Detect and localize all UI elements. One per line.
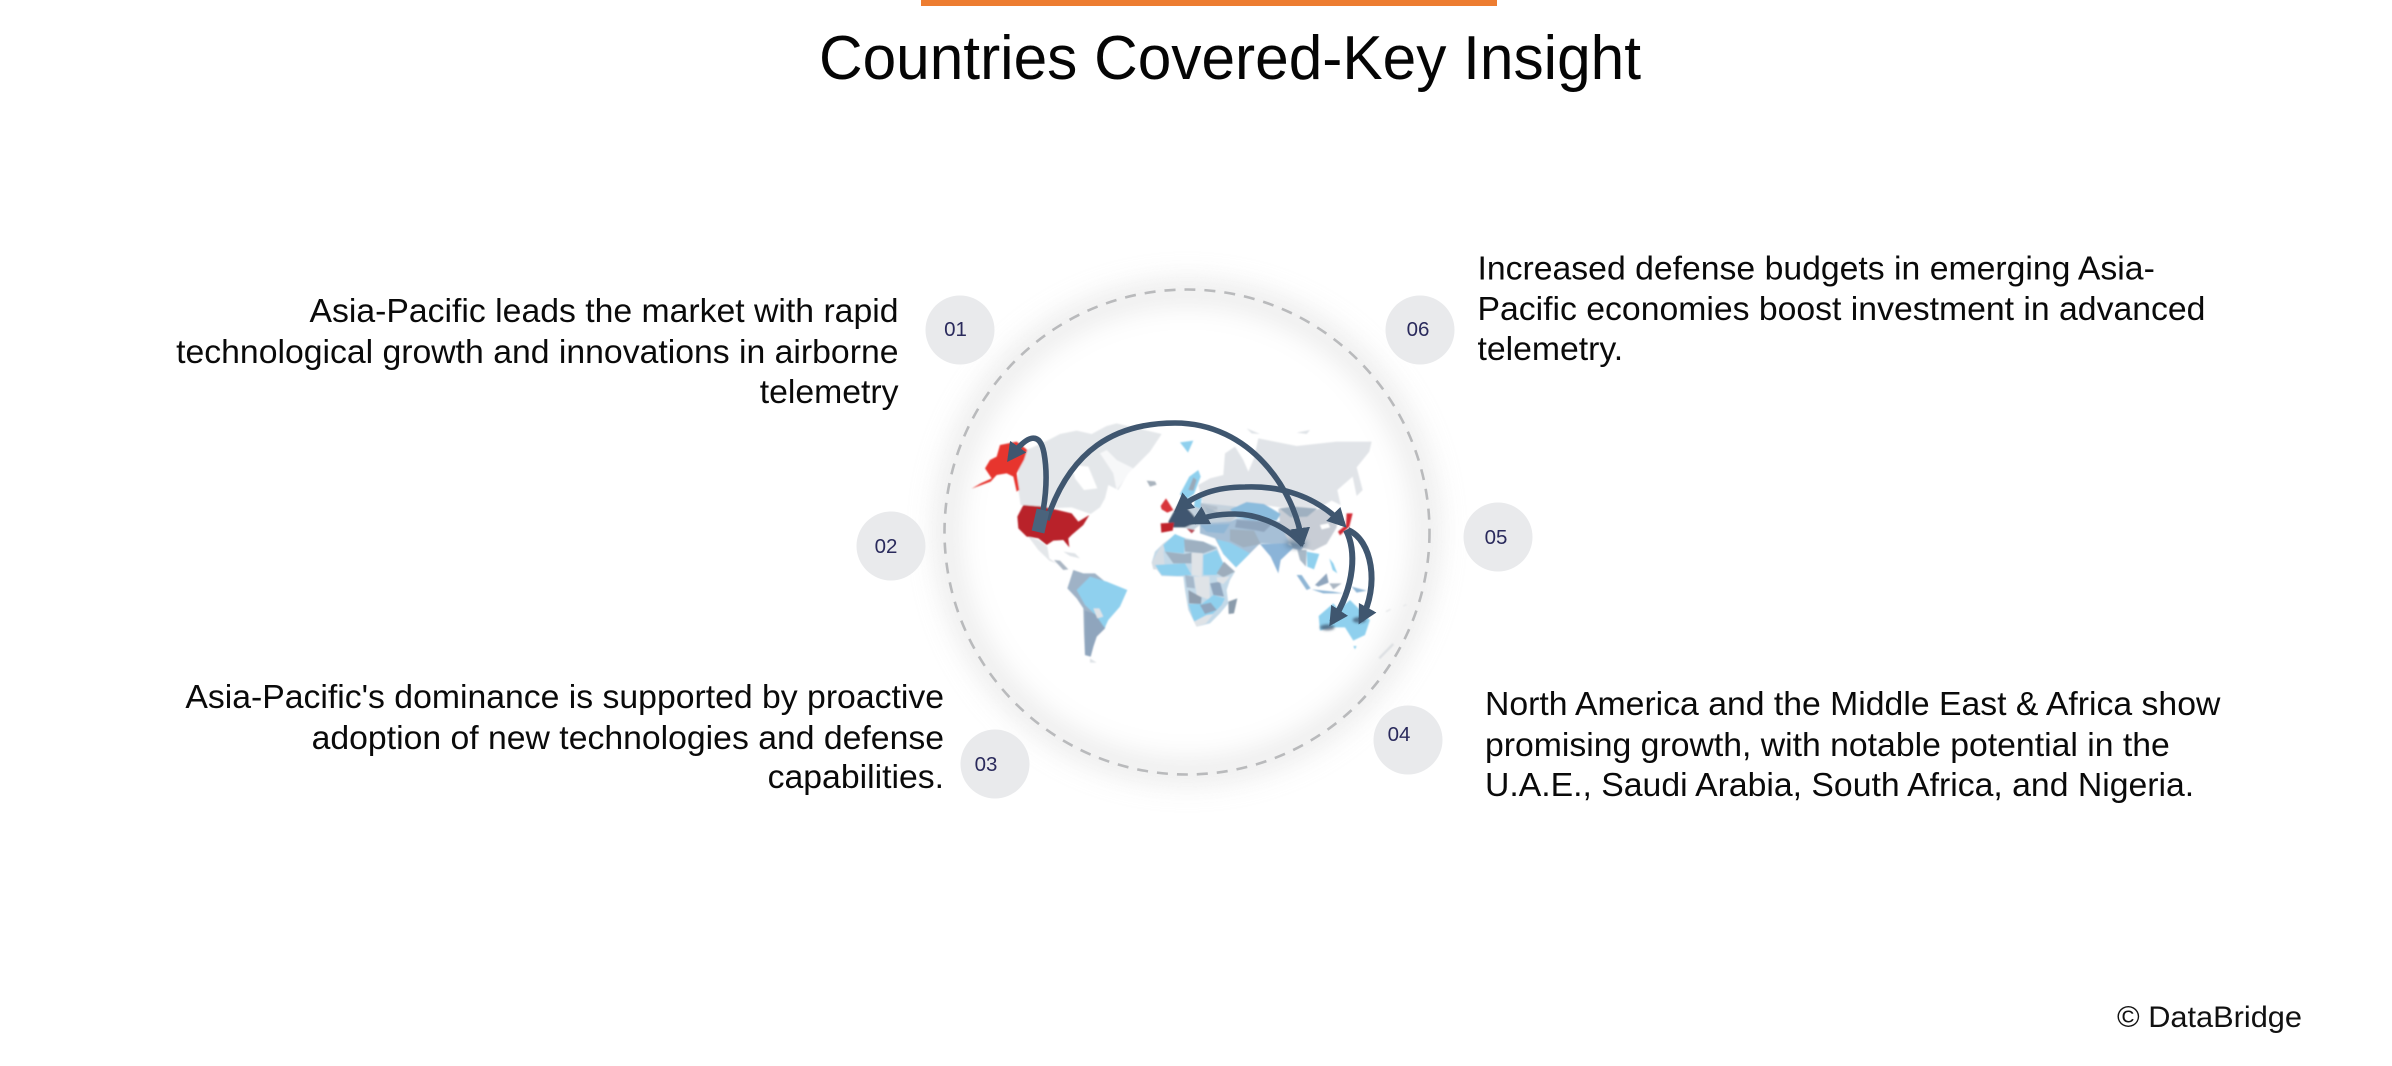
- badge 05: 05: [1485, 526, 1507, 549]
- arrow: usa to alaska: [1010, 438, 1046, 526]
- map: southeast asia and oceania: [1297, 558, 1367, 593]
- map: australia: [1319, 600, 1407, 658]
- arrow: japan to western australia: [1332, 530, 1352, 622]
- insight 01 text: telemetry: [760, 373, 899, 411]
- insight 01 text: technological growth and innovations in airborne: [176, 333, 898, 371]
- badge 03: [960, 730, 1030, 798]
- arrow: usa to china: [1047, 423, 1302, 542]
- badge 04: 04: [1388, 723, 1410, 746]
- badge 06: [1386, 296, 1454, 364]
- badge 01: 01: [944, 318, 967, 341]
- badge 05: [1464, 502, 1532, 572]
- central globe circle: [939, 284, 1435, 780]
- arrow: japan to eastern australia: [1348, 530, 1372, 620]
- badge 01: [926, 296, 994, 364]
- insight 03 text: [185, 678, 944, 796]
- arrow: china to europe: [1194, 514, 1303, 545]
- world map: [972, 423, 1407, 663]
- insight 04 text: U.A.E., Saudi Arabia, South Africa, and Nigeria.: [1485, 766, 2194, 804]
- map: north america and greenland: [1017, 423, 1193, 570]
- insight 03 text: adoption of new technologies and defense: [312, 719, 944, 757]
- arrow base on usa: [1038, 510, 1043, 532]
- insight 06 text: telemetry.: [1478, 330, 1623, 368]
- insight 06 text: Pacific economies boost investment in advanced: [1478, 290, 2205, 328]
- top orange accent bar: [921, 0, 1497, 6]
- badge 02: 02: [875, 535, 897, 558]
- map: usa: [1017, 505, 1089, 547]
- insight 03 text: Asia-Pacific's dominance is supported by proactive: [185, 678, 944, 716]
- map: alaska: [972, 442, 1027, 492]
- title: Countries Covered-Key Insight: [819, 24, 1641, 93]
- badge 03: 03: [975, 753, 997, 776]
- insight 01 text: [176, 292, 899, 411]
- badge 02: [856, 512, 926, 580]
- insight 06 text: [1478, 250, 2205, 368]
- map: europe: [1161, 498, 1220, 533]
- copyright: © DataBridge: [2117, 1001, 2302, 1034]
- insight 04 text: [1485, 685, 2221, 804]
- insight 04 text: promising growth, with notable potential in the: [1485, 726, 2170, 764]
- badge 06: 06: [1407, 318, 1429, 341]
- map: japan: [1338, 513, 1353, 535]
- insight 04 text: North America and the Middle East & Africa show: [1485, 685, 2221, 723]
- insight 01 text: Asia-Pacific leads the market with rapid: [310, 292, 898, 330]
- arrow: japan to europe: [1178, 487, 1343, 524]
- map: china origin smudge: [1285, 540, 1307, 548]
- insight 03 text: capabilities.: [768, 758, 944, 796]
- map: south america: [1067, 570, 1127, 663]
- badge 04: [1374, 706, 1442, 774]
- connection arrows: [1010, 423, 1372, 622]
- map: eurasia: [1180, 428, 1372, 573]
- insight 06 text: Increased defense budgets in emerging Asia-: [1478, 250, 2155, 288]
- map: africa: [1152, 534, 1235, 627]
